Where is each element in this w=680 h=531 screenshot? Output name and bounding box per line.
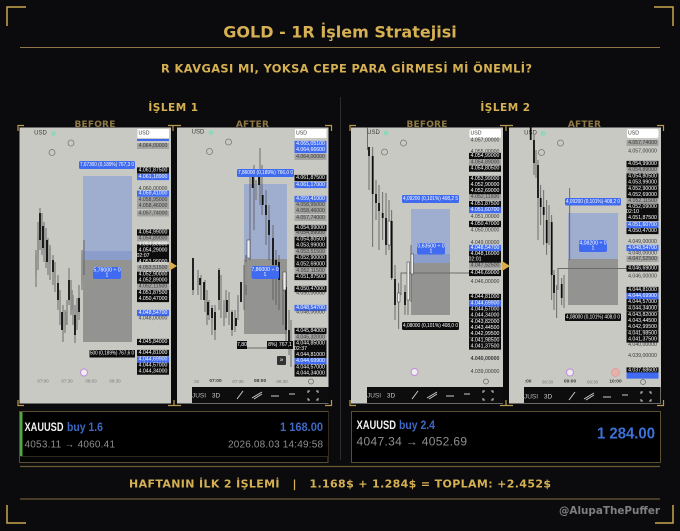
chart: trade 2 after: 4.041,98500 xyxy=(628,330,657,336)
chart: trade 2 before: 0,63500 ÷ 0 xyxy=(417,244,445,250)
chart: trade 1 before: 4.057,74000 xyxy=(139,210,168,216)
chart: trade 1 before: 4.050,47000 xyxy=(139,296,168,302)
chart: trade 2 before: 4.044,69900 xyxy=(471,300,500,306)
chart: trade 2 after: JUSI xyxy=(524,394,538,400)
chart: trade 2 after: 4.044,69900 xyxy=(628,293,657,299)
chart: trade 2 after: 4.054,99000 xyxy=(628,161,657,167)
chart: trade 2 before: 4.052,11500 xyxy=(471,194,499,200)
chart: trade 1 after: 08:30 xyxy=(276,379,288,384)
chart: trade 2 after: 4.047,52500 xyxy=(628,256,657,262)
chart: trade 2 before: 4.042,99500 xyxy=(471,331,500,337)
chart: trade 2 after: 4.042,99500 xyxy=(628,324,657,330)
chart: trade 1 after: 7,86000 ÷ 0 xyxy=(251,267,279,273)
chart: trade 2 after: 1 xyxy=(592,246,595,252)
chart: trade 2 before: 4.049,00000 xyxy=(471,240,500,246)
chart: trade 1 after: 4.044,85000 xyxy=(296,340,325,346)
chart: trade 2 before: 3D xyxy=(387,392,395,400)
chart: trade 1 before: 4.052,11500 xyxy=(139,284,167,290)
chart: trade 1 before: 4.054,89000 xyxy=(139,236,168,242)
chart: trade 2 before: 02:01 xyxy=(469,256,482,262)
chart: trade 1 before: 07:30 xyxy=(61,378,73,384)
chart: trade 2 before: 4.044,81000 xyxy=(471,294,500,300)
chart: trade 1 after: » xyxy=(280,358,284,364)
chart: trade 2 after: 4.054,89000 xyxy=(628,167,657,173)
chart: trade 2 before: 4.046,69000 xyxy=(471,270,500,276)
chart: trade 1 after: 4.044,81000 xyxy=(296,352,325,358)
chart: trade 1 after: 3D xyxy=(212,392,220,400)
chart: trade 1 before: USD xyxy=(34,130,47,136)
chart: trade 1 after: 4.061,87500 xyxy=(296,175,325,181)
chart: trade 2 before: 4.048,54700 xyxy=(471,245,500,251)
chart: trade 1 after: 4.052,69000 xyxy=(296,261,325,267)
frame brackets: trade 1 xyxy=(18,126,332,406)
chart: trade 2 after: 4.052,90000 xyxy=(628,186,657,192)
frame brackets: trade 2 xyxy=(350,126,664,406)
trade card 2: 4047.34 → 4052.69 xyxy=(356,435,467,449)
chart: trade 2 after: 4.053,99000 xyxy=(628,180,657,186)
chart: trade 2 after: 4.043,44500 xyxy=(628,318,657,324)
chart: trade 2 after: 10:00 xyxy=(609,378,622,384)
chart: trade 2 before: 4.043,82000 xyxy=(471,319,500,325)
chart: trade 2 before: 4.052,69000 xyxy=(471,188,500,194)
chart: trade 2 after: 4.050,47000 xyxy=(628,228,657,234)
chart: trade 2 after: 4.044,34000 xyxy=(628,306,657,312)
chart: trade 2 after: USD xyxy=(628,130,639,136)
chart: trade 1 before: 4.054,80500 xyxy=(139,242,168,248)
chart: trade 1 before: 500 (0,189%) 767,6 0 xyxy=(90,351,134,357)
watermark: @AlupaThePuffer xyxy=(559,505,661,517)
chart: trade 1 after: 07:30 xyxy=(232,379,244,384)
chart: trade 1 before: 4.044,57000 xyxy=(139,363,168,369)
chart: trade 1 after: 4.058,46000 xyxy=(296,208,325,214)
subtitle: R KAVGASI MI, YOKSA CEPE PARA GİRMESİ Mİ ÖNEMLİ? xyxy=(161,60,532,76)
chart: trade 1 after: 4.058,95000 xyxy=(296,202,325,208)
chart: trade 2 after: 4.057,74000 xyxy=(628,140,657,146)
chart: trade 2 after: 4,09200 (0,101%) 408,2 0 xyxy=(566,199,620,205)
chart: trade 1 before: 4.051,87500 xyxy=(139,290,168,296)
chart: trade 2 after: 4.052,09000 xyxy=(628,204,657,210)
arrow: before to after, trade 1 xyxy=(169,261,177,271)
chart: trade 1 after: 4.054,99000 xyxy=(296,225,325,231)
chart: trade 2 after: 02:10 xyxy=(626,209,639,215)
chart: trade 2 after: 4.046,00000 xyxy=(628,274,657,280)
chart: trade 1 before: 5,78000 ÷ 0 xyxy=(93,268,121,274)
chart: trade 1 after: 4.053,51500 xyxy=(296,249,325,255)
chart: trade 1 after: 7,80 xyxy=(237,342,247,348)
chart: trade 2 after: USD xyxy=(524,130,537,136)
label: before 1: BEFORE xyxy=(74,120,116,130)
chart: trade 2 before: 4.054,89000 xyxy=(471,160,500,166)
chart: trade 1 after: USD xyxy=(296,130,307,136)
chart: trade 2 after: :00 xyxy=(525,378,532,384)
chart: trade 2 before: 4,08000 (0,101%) 408,0 0 xyxy=(403,323,458,329)
chart: trade 2 before xyxy=(351,127,503,404)
chart: trade 1 after: 4.044,34000 xyxy=(296,370,325,376)
chart: trade 1 after: 4.045,84000 xyxy=(296,328,325,334)
chart: trade 2 before: USD xyxy=(367,130,380,136)
label: before 2: BEFORE xyxy=(406,120,448,130)
chart: trade 1 before: 4.044,69900 xyxy=(139,357,168,363)
chart: trade 2 after: 4.046,69000 xyxy=(628,266,657,272)
chart: trade 1 after: 4.045,32000 xyxy=(296,334,325,340)
chart: trade 2 after: 4.044,57000 xyxy=(628,299,657,305)
chart: trade 1 before: 4.048,54700 xyxy=(139,310,168,316)
chart: trade 2 before: 4.050,47000 xyxy=(471,221,500,227)
chart: trade 2 after: 4.040,00000 xyxy=(628,342,657,348)
chart: trade 1 after xyxy=(177,128,328,404)
chart: trade 1 before: 4.053,99000 xyxy=(139,259,168,265)
chart: trade 2 before: 4.051,60700 xyxy=(471,207,500,213)
chart: trade 1 after: 02:37 xyxy=(294,346,307,352)
chart: trade 1 before: 4.058,46000 xyxy=(139,203,168,209)
chart: trade 1 before: 4.054,29000 xyxy=(139,248,168,254)
chart: trade 2 after: 3D xyxy=(544,394,552,400)
chart: trade 2 before: 4.051,87500 xyxy=(471,201,500,207)
chart: trade 2 after: 4.052,69000 xyxy=(628,192,657,198)
chart: trade 2 after: 4.052,11500 xyxy=(628,198,657,204)
chart: trade 1 after: 08:00 xyxy=(254,378,266,384)
chart: trade 2 after: 4.049,00000 xyxy=(628,239,657,245)
chart: trade 1 before: 08:00 xyxy=(85,378,97,384)
chart: trade 1 before: 4.045,84000 xyxy=(139,339,168,345)
chart: trade 1 after: 4.044,57000 xyxy=(296,364,325,370)
chart: trade 2 before: 4.054,99000 xyxy=(471,153,500,159)
chart: trade 2 before: JUSI xyxy=(367,392,381,400)
title: GOLD - 1R İşlem Stratejisi xyxy=(223,22,457,42)
chart: trade 1 after: 07:00 xyxy=(209,378,222,384)
chart: trade 1 before: 4.052,89000 xyxy=(139,278,168,284)
trade card 1: 4053.11 → 4060.41 xyxy=(24,440,115,450)
arrow: before to after, trade 2 xyxy=(502,261,510,271)
chart: trade 2 before: 4.048,16000 xyxy=(471,251,500,257)
chart: trade 2 before: 4.039,00000 xyxy=(471,369,500,375)
chart: trade 1 before: 4.052,90000 xyxy=(139,272,168,278)
heading: trade 1: İŞLEM 1 xyxy=(148,100,199,114)
trade card 1: buy 1.6 xyxy=(67,420,103,434)
chart: trade 1 before: 02:07 xyxy=(137,253,150,259)
chart: trade 2 before: 4.050,00000 xyxy=(471,228,500,234)
chart: trade 1 after: 4.054,89000 xyxy=(296,230,325,236)
chart: trade 2 before: 4,09200 (0,101%) 408,2 5 xyxy=(403,196,458,202)
heading: trade 2: İŞLEM 2 xyxy=(480,100,531,114)
chart: trade 1 before: 4.054,99000 xyxy=(139,230,168,236)
trade card 2 xyxy=(352,412,660,462)
chart: trade 2 after: 4.051,87500 xyxy=(628,215,657,221)
chart: trade 1 after: 7,86000 (0,189%) 766,0 0 xyxy=(238,170,293,176)
chart: trade 2 before: 4.040,00000 xyxy=(471,356,500,362)
chart: trade 2 after: 09:30 xyxy=(587,380,599,384)
chart: trade 1 after: 4.061,17000 xyxy=(296,182,325,188)
chart: trade 1 after: JUSI xyxy=(192,392,206,400)
chart: trade 1 after: 4.053,99000 xyxy=(296,242,325,248)
chart: trade 1 after: 1 xyxy=(264,272,267,278)
chart: trade 1 before: 4.064,00000 xyxy=(139,143,168,149)
chart: trade 2 after: 4.044,81000 xyxy=(628,287,657,293)
chart: trade 2 after xyxy=(509,127,661,404)
chart: trade 1 after: 4.051,87500 xyxy=(296,274,325,280)
chart: trade 2 before: 4.052,90000 xyxy=(471,182,500,188)
chart: trade 1 before: 07:00 xyxy=(37,378,49,384)
chart: trade 1 after: 4.057,74000 xyxy=(296,215,325,221)
chart: trade 1 before: 4.044,34000 xyxy=(139,369,168,375)
chart: trade 1 after: 4.059,41000 xyxy=(296,196,325,202)
chart: trade 1 before: 4.059,41000 xyxy=(139,191,168,197)
chart: trade 2 after: 4,08000 (0,101%) 408,0 0 xyxy=(566,314,620,320)
chart: trade 2 after: 4.057,00000 xyxy=(628,148,657,154)
trade card 2: 1 284.00 xyxy=(597,426,655,442)
summary: HAFTANIN İLK 2 İŞLEMİ | 1.168$ + 1.284$ = TOPLAM: +2.452$ xyxy=(129,477,551,491)
chart: trade 1 before: 7,67300 (0,189%) 767,3 0 xyxy=(80,162,134,168)
trade card 1: 1 168.00 xyxy=(280,420,323,434)
chart: trade 2 after: 09:00 xyxy=(564,378,576,384)
chart: trade 1 after: 4.044,69900 xyxy=(296,358,325,364)
chart: trade 2 before: 4.047,52500 xyxy=(471,262,500,268)
chart: trade 1 after: 4.050,47000 xyxy=(296,286,325,292)
chart: trade 2 after: 4.048,00000 xyxy=(628,250,657,256)
chart: trade 2 after: 4,08200 ÷ 0 xyxy=(579,240,607,246)
chart: trade 1 before: 4.061,87500 xyxy=(139,168,168,174)
chart: trade 2 after: 4.037,68600 xyxy=(628,368,657,374)
trade card 1: 2026.08.03 14:49:58 xyxy=(228,440,323,450)
chart: trade 2 after: 4.043,82000 xyxy=(628,312,657,318)
chart: trade 2 after: 4.041,37500 xyxy=(628,336,657,342)
chart: trade 2 before: 4.046,00000 xyxy=(471,279,500,285)
chart: trade 2 after: 4.048,54700 xyxy=(628,245,657,251)
chart: trade 1 after: 8%) 767,1 xyxy=(268,342,292,348)
chart: trade 1 after: 4.064,00000 xyxy=(296,154,325,160)
chart: trade 1 before: 08:30 xyxy=(109,378,121,384)
chart: trade 1 before: 4.044,81000 xyxy=(139,350,168,356)
chart: trade 2 after: 08:30 xyxy=(542,380,554,384)
chart: trade 2 before: 4.041,98500 xyxy=(471,338,500,344)
chart: trade 2 before: USD xyxy=(471,130,482,136)
chart: trade 2 before: 4.057,00000 xyxy=(471,138,500,144)
trade card 1: XAUUSD xyxy=(24,420,64,434)
chart: trade 2 after: 4.051,60700 xyxy=(628,222,657,228)
trade card 1 xyxy=(20,412,328,462)
chart: trade 1 before: USD xyxy=(139,130,150,136)
chart: trade 2 before: 4.055,00000 xyxy=(471,149,500,155)
chart: trade 1 after: 4.050,00000 xyxy=(296,290,325,296)
chart: trade 2 after: 4.039,00000 xyxy=(628,353,657,359)
chart: trade 2 before: 4.051,00000 xyxy=(471,214,500,220)
chart: trade 1 after: 4.048,54700 xyxy=(296,305,325,311)
chart: trade 1 after: 4.054,80500 xyxy=(296,237,325,243)
trade card 2: buy 2.4 xyxy=(399,418,435,432)
chart: trade 1 after: 4.064,66600 xyxy=(296,147,325,153)
chart: trade 1 before: 4.048,00000 xyxy=(139,316,168,322)
chart: trade 1 after: 4.052,90000 xyxy=(296,255,325,261)
chart: trade 1 before: 4.061,18900 xyxy=(139,174,168,180)
trade card 2: XAUUSD xyxy=(356,418,396,432)
chart: trade 1 before: 4.058,95000 xyxy=(139,197,168,203)
chart: trade 1 after: 4.065,05100 xyxy=(296,141,325,147)
chart: trade 1 after: 4.048,00000 xyxy=(296,310,325,316)
chart: trade 1 before: 4.060,00000 xyxy=(139,186,168,192)
chart: trade 2 before: 4.053,99000 xyxy=(471,176,500,182)
chart: trade 1 after: :30 xyxy=(193,379,200,384)
chart: trade 2 before: 4.041,37500 xyxy=(471,344,500,350)
label: after 2: AFTER xyxy=(568,120,601,130)
chart: trade 1 after: 4.052,11500 xyxy=(296,268,325,274)
chart: trade 2 after: 4.054,80500 xyxy=(628,174,657,180)
chart: trade 1 after: USD xyxy=(192,130,205,136)
chart: trade 1 before: 1 xyxy=(106,272,109,278)
chart: trade 1 before: 4.053,51500 xyxy=(139,265,168,271)
chart: trade 2 before: 4.054,80500 xyxy=(471,166,500,172)
chart: trade 2 before: 4.044,57000 xyxy=(471,306,500,312)
chart: trade 2 before: 4.044,34000 xyxy=(471,312,500,318)
chart: trade 1 before xyxy=(20,128,171,404)
label: after 1: AFTER xyxy=(236,120,269,130)
chart: trade 2 before: 4.043,44500 xyxy=(471,325,500,331)
chart: trade 2 before: 1 xyxy=(430,248,433,254)
